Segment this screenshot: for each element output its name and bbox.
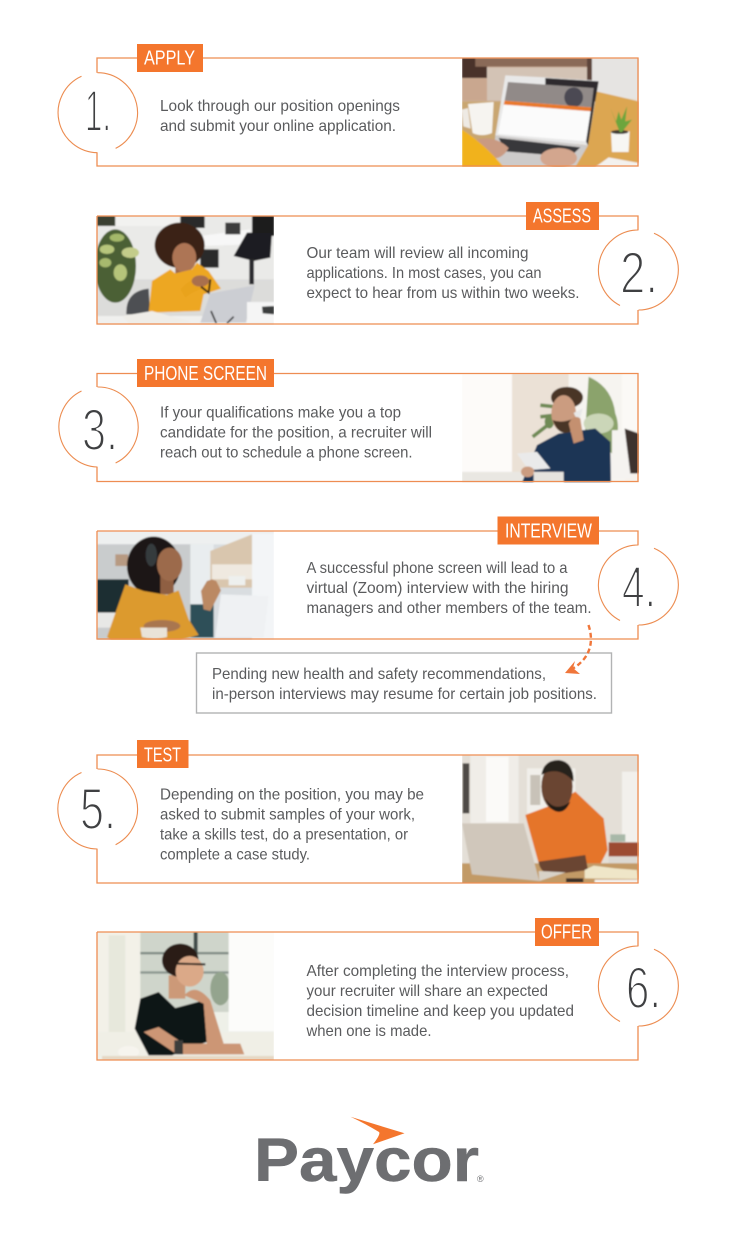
panel border [97,755,638,883]
number circle 1: 1. [85,79,111,144]
panel border [97,374,638,482]
label tab: OFFER [535,918,599,946]
step 3 description: candidate for the position, a recruiter will [160,424,432,442]
photo: man on phone with tablet [462,374,639,482]
panel: step 1 apply [58,44,639,168]
panel border [97,216,638,324]
number circle 6 [598,946,678,1026]
step 6 description [306,963,574,1040]
step 1 description: Look through our position openings [160,98,400,115]
number circle 2 [598,230,678,310]
label tab: PHONE SCREEN [137,359,274,387]
step 3 description: reach out to schedule a phone screen. [160,444,412,462]
step 2 description: applications. In most cases, you can [306,265,542,282]
callout: in-person interviews note: in-person interviews may resume for certain job positions. [212,686,597,703]
registered mark: ® [477,1174,484,1184]
label tab: OFFER: OFFER [541,922,592,944]
step 2 description: Our team will review all incoming [306,245,528,262]
step 2 description: expect to hear from us within two weeks. [306,285,580,302]
step 1 description: and submit your online application. [160,118,396,135]
callout: in-person interviews note: Pending new health and safety recommendations, [212,666,546,683]
label tab: APPLY: APPLY [144,48,195,70]
step 5 description [160,786,424,864]
number circle 2: 2. [620,241,658,306]
arrow: dashed from step 4 to callout [565,625,591,674]
logo wordmark: Paycor [254,1126,479,1194]
label tab: ASSESS: ASSESS [533,206,591,228]
label tab: TEST: TEST [144,744,181,766]
step 5 description: Depending on the position, you may be [160,786,424,804]
number circle 4 [598,545,678,625]
step 3 description: If your qualifications make you a top [160,404,401,422]
panel: step 2 assess [95,202,678,325]
step 5 description: complete a case study. [160,846,310,864]
label tab: ASSESS [526,202,599,230]
step 6 description: your recruiter will share an expected [306,983,548,1000]
photo: woman with headphones on video call [97,531,274,640]
panel: step 5 test [58,740,639,884]
step 6 description: After completing the interview process, [306,963,569,980]
panel border [97,58,638,166]
step 2 description [306,245,580,302]
step 1 description [160,98,400,135]
panel: step 6 offer [97,918,678,1060]
number circle 5 [58,769,138,849]
label tab: INTERVIEW [498,516,599,544]
panel border [97,932,638,1060]
photo: woman in yellow sweater at laptop [95,216,274,325]
number circle 3: 3. [82,398,118,463]
step 4 description: managers and other members of the team. [306,600,592,617]
number circle 6: 6. [626,956,661,1021]
label tab: APPLY [137,44,203,72]
step 4 description [306,560,592,617]
step 6 description: when one is made. [306,1023,432,1040]
photo: woman with glasses in black shirt [97,932,274,1060]
step 5 description: asked to submit samples of your work, [160,806,415,824]
step 6 description: decision timeline and keep you updated [306,1003,574,1020]
panel: step 4 interview [97,516,678,640]
step 4 description: virtual (Zoom) interview with the hiring [306,580,568,597]
photo: man in orange shirt at laptop [462,755,639,884]
label tab: TEST [137,740,188,768]
number circle 5: 5. [80,777,116,842]
label tab: INTERVIEW: INTERVIEW [505,520,592,542]
panel border [97,531,638,639]
step 3 description [160,404,432,462]
number circle 4: 4. [622,555,656,620]
logo: Paycor [254,1117,484,1194]
logo swoosh [350,1117,404,1144]
step 4 description: A successful phone screen will lead to a [306,560,568,577]
panel: step 3 phone screen [59,359,639,482]
number circle 3 [59,387,138,467]
number circle 1 [58,73,138,153]
callout: in-person interviews note [196,653,612,713]
label tab: PHONE SCREEN: PHONE SCREEN [144,363,267,385]
step 5 description: take a skills test, do a presentation, or [160,826,409,844]
photo: laptop on desk [462,58,639,168]
